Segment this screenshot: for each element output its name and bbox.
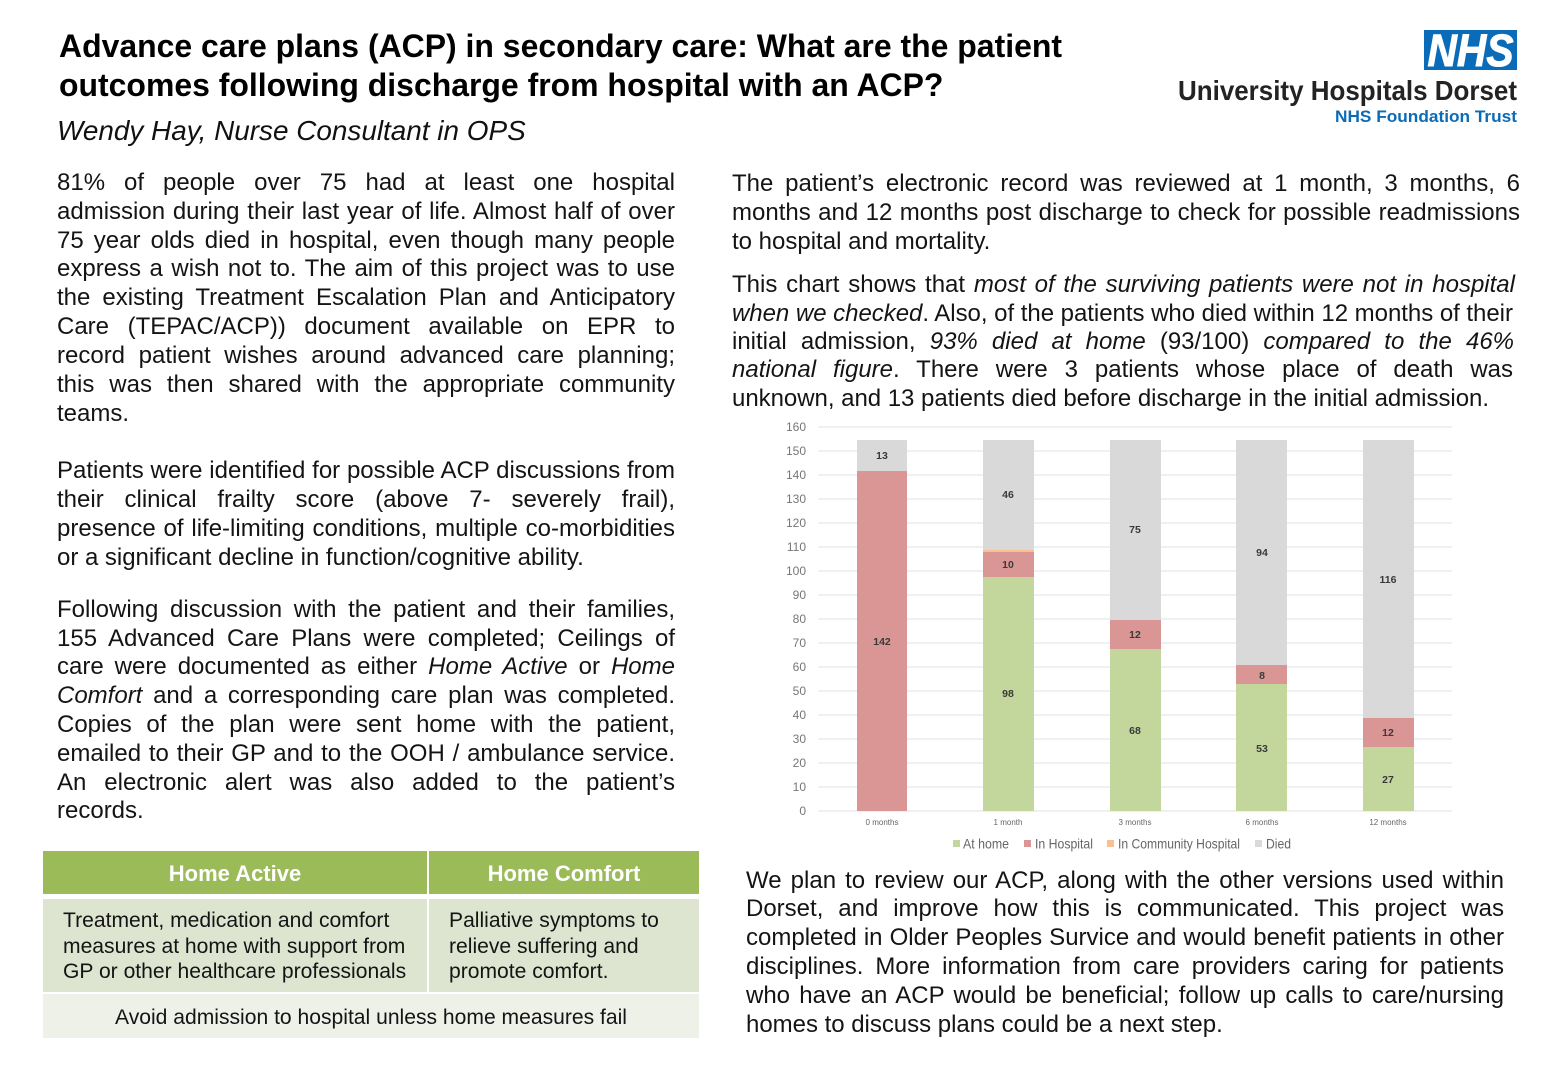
bar: 1 month bbox=[983, 440, 1034, 811]
text block: care plans completed: An electronic alert was also added to the patient’s bbox=[57, 769, 675, 796]
x axis labels bbox=[866, 818, 1407, 827]
y axis labels: 50 bbox=[793, 684, 806, 698]
cell: Home Active description: Treatment, medication and comfort bbox=[63, 909, 389, 932]
y axis labels: 70 bbox=[793, 636, 806, 650]
legend: In Community Hospital bbox=[1118, 836, 1240, 852]
text block: next steps bbox=[746, 867, 1504, 1038]
text block: next steps: Dorset, and improve how this is communicated. This project was bbox=[746, 895, 1504, 922]
text block: chart findings: unknown, and 13 patients died before discharge in the initial admission. bbox=[732, 385, 1489, 412]
y axis labels: 0 bbox=[799, 804, 806, 818]
bar: 1 month: 46 bbox=[1002, 489, 1014, 501]
cell: shared goal bbox=[43, 994, 699, 1038]
text block: care plans completed: Copies of the plan were sent home with the patient, bbox=[57, 711, 675, 738]
header: Home Comfort bbox=[429, 851, 699, 894]
text block: background: Care (TEPAC/ACP)) document available on EPR to bbox=[57, 313, 675, 340]
text block: patient identification: or a significant decline in function/cognitive ability. bbox=[57, 544, 584, 571]
y axis labels: 90 bbox=[793, 588, 806, 602]
legend: Died bbox=[1266, 836, 1291, 852]
text block: patient identification bbox=[57, 457, 675, 571]
text block: patient identification: their clinical frailty score (above 7- severely frail), bbox=[57, 486, 675, 513]
cell: Home Comfort description: promote comfort. bbox=[449, 960, 608, 983]
cell: shared goal: Avoid admission to hospital unless home measures fail bbox=[115, 1006, 627, 1029]
bar: 6 months: 8 bbox=[1259, 670, 1265, 682]
x axis labels: 6 months bbox=[1246, 818, 1278, 827]
text block: care plans completed: records. bbox=[57, 797, 144, 824]
text block: record review bbox=[732, 170, 1520, 255]
text block: care plans completed bbox=[57, 596, 676, 824]
x axis labels: 12 months bbox=[1369, 818, 1407, 827]
text block: patient identification: presence of life-limiting conditions, multiple co-morbidities bbox=[57, 515, 675, 542]
cell: Home Active description: measures at home with support from bbox=[63, 934, 405, 958]
logo: University Hospitals Dorset NHS: NHS bbox=[1428, 25, 1514, 76]
bar: 3 months: 12 bbox=[1129, 629, 1141, 641]
text block: care plans completed: emailed to their GP and to the OOH / ambulance service. bbox=[57, 740, 675, 767]
y axis labels: 80 bbox=[793, 612, 806, 626]
text block: background: express a wish not to. The aim of this project was to use bbox=[57, 255, 675, 282]
logo: University Hospitals Dorset NHS bbox=[1178, 25, 1517, 126]
y axis labels bbox=[786, 420, 806, 818]
y axis labels: 140 bbox=[786, 468, 806, 482]
text block: care plans completed: Comfort and a corresponding care plan was completed. bbox=[57, 682, 675, 709]
text block: next steps: We plan to review our ACP, along with the other versions used within bbox=[746, 867, 1504, 894]
bar: 12 months: 27 bbox=[1382, 774, 1394, 786]
text block: next steps: who have an ACP would be beneficial; follow up calls to care/nursing bbox=[746, 982, 1504, 1009]
y axis labels: 100 bbox=[786, 564, 806, 578]
y axis labels: 160 bbox=[786, 420, 806, 434]
y axis labels: 120 bbox=[786, 516, 806, 530]
stacked bar chart: patient outcomes over time bbox=[786, 420, 1452, 852]
bar: 0 months: 13 bbox=[876, 450, 888, 462]
text block: patient identification: Patients were identified for possible ACP discussions from bbox=[57, 457, 675, 484]
bar: 3 months: 68 bbox=[1129, 725, 1141, 737]
text block: chart findings: when we checked. Also, of the patients who died within 12 months of their bbox=[732, 300, 1513, 327]
text block: background: this was then shared with the appropriate community bbox=[57, 371, 675, 398]
text block: care plans completed: 155 Advanced Care Plans were completed; Ceilings of bbox=[57, 625, 675, 652]
bar: 0 months: 142 bbox=[873, 636, 891, 648]
text block: record review: The patient’s electronic record was reviewed at 1 month, 3 months, 6 bbox=[732, 170, 1520, 197]
y axis labels: 150 bbox=[786, 444, 806, 458]
text block: record review: to hospital and mortality. bbox=[732, 228, 990, 255]
bar: 12 months: 12 bbox=[1382, 727, 1394, 739]
bar: 1 month: 98 bbox=[1002, 688, 1014, 700]
x axis labels: 1 month bbox=[994, 818, 1022, 827]
title bbox=[58, 27, 1062, 103]
y axis labels: 30 bbox=[793, 732, 806, 746]
bar: 3 months bbox=[1110, 440, 1161, 811]
y axis labels: 10 bbox=[793, 780, 806, 794]
author line: Wendy Hay, Nurse Consultant in OPS bbox=[57, 115, 526, 146]
text block: chart findings: national figure. There were 3 patients whose place of death was bbox=[732, 356, 1513, 383]
text block: background: 81% of people over 75 had at least one hospital bbox=[57, 169, 675, 196]
y axis labels: 60 bbox=[793, 660, 806, 674]
bar: 3 months: 75 bbox=[1129, 524, 1141, 536]
table: ceilings of care bbox=[43, 851, 699, 1038]
title: Advance care plans (ACP) in secondary care: What are the patient bbox=[58, 27, 1062, 64]
title: outcomes following discharge from hospital with an ACP? bbox=[58, 66, 943, 103]
x axis labels: 3 months bbox=[1119, 818, 1151, 827]
legend: In Hospital bbox=[1035, 836, 1093, 852]
bar: 0 months bbox=[857, 440, 907, 811]
cell: Home Active description bbox=[43, 899, 427, 992]
text block: next steps: completed in Older Peoples Survice and would benefit patients in other bbox=[746, 924, 1504, 951]
bar: 6 months bbox=[1236, 440, 1287, 811]
text block: background: the existing Treatment Escalation Plan and Anticipatory bbox=[57, 284, 675, 311]
header: Home Active: Home Active bbox=[169, 861, 301, 886]
bar: 12 months bbox=[1363, 440, 1414, 811]
text block: care plans completed: care were documented as either Home Active or Home bbox=[57, 653, 675, 680]
logo: University Hospitals Dorset NHS: NHS Foundation Trust bbox=[1335, 107, 1517, 126]
text block: chart findings: This chart shows that most of the surviving patients were not in hospital bbox=[732, 271, 1515, 298]
text block: background: 75 year olds died in hospital, even though many people bbox=[57, 227, 675, 254]
legend bbox=[953, 836, 1291, 852]
text block: care plans completed: Following discussion with the patient and their families, bbox=[57, 596, 675, 623]
bar: 12 months: 116 bbox=[1380, 574, 1397, 586]
text block: chart findings: initial admission, 93% died at home (93/100) compared to the 46% bbox=[732, 328, 1514, 355]
text block: background: admission during their last year of life. Almost half of over bbox=[57, 198, 675, 225]
text block: next steps: homes to discuss plans could be a next step. bbox=[746, 1011, 1223, 1038]
text block: background: record patient wishes around advanced care planning; bbox=[57, 342, 675, 369]
y axis labels: 110 bbox=[787, 540, 806, 554]
legend: At home bbox=[963, 836, 1009, 852]
x axis labels: 0 months bbox=[866, 818, 898, 827]
y axis labels: 40 bbox=[793, 708, 806, 722]
bar: 6 months: 94 bbox=[1256, 547, 1268, 559]
header: Home Active bbox=[43, 851, 427, 894]
y axis labels: 130 bbox=[786, 492, 806, 506]
text block: chart findings bbox=[732, 271, 1516, 412]
cell: Home Comfort description: relieve suffering and bbox=[449, 934, 639, 958]
cell: Home Comfort description: Palliative symptoms to bbox=[449, 909, 659, 932]
cell: Home Comfort description bbox=[429, 899, 699, 992]
text block: background bbox=[57, 169, 675, 427]
text block: next steps: disciplines. More information from care providers caring for patients bbox=[746, 953, 1504, 980]
bar: 1 month: 10 bbox=[1002, 559, 1014, 571]
text block: record review: months and 12 months post discharge to check for possible readmissions bbox=[732, 199, 1520, 226]
header: Home Comfort: Home Comfort bbox=[488, 861, 640, 886]
cell: Home Active description: GP or other healthcare professionals bbox=[63, 960, 406, 983]
y axis labels: 20 bbox=[793, 756, 806, 770]
bar: 6 months: 53 bbox=[1256, 743, 1268, 755]
text block: background: teams. bbox=[57, 400, 129, 427]
